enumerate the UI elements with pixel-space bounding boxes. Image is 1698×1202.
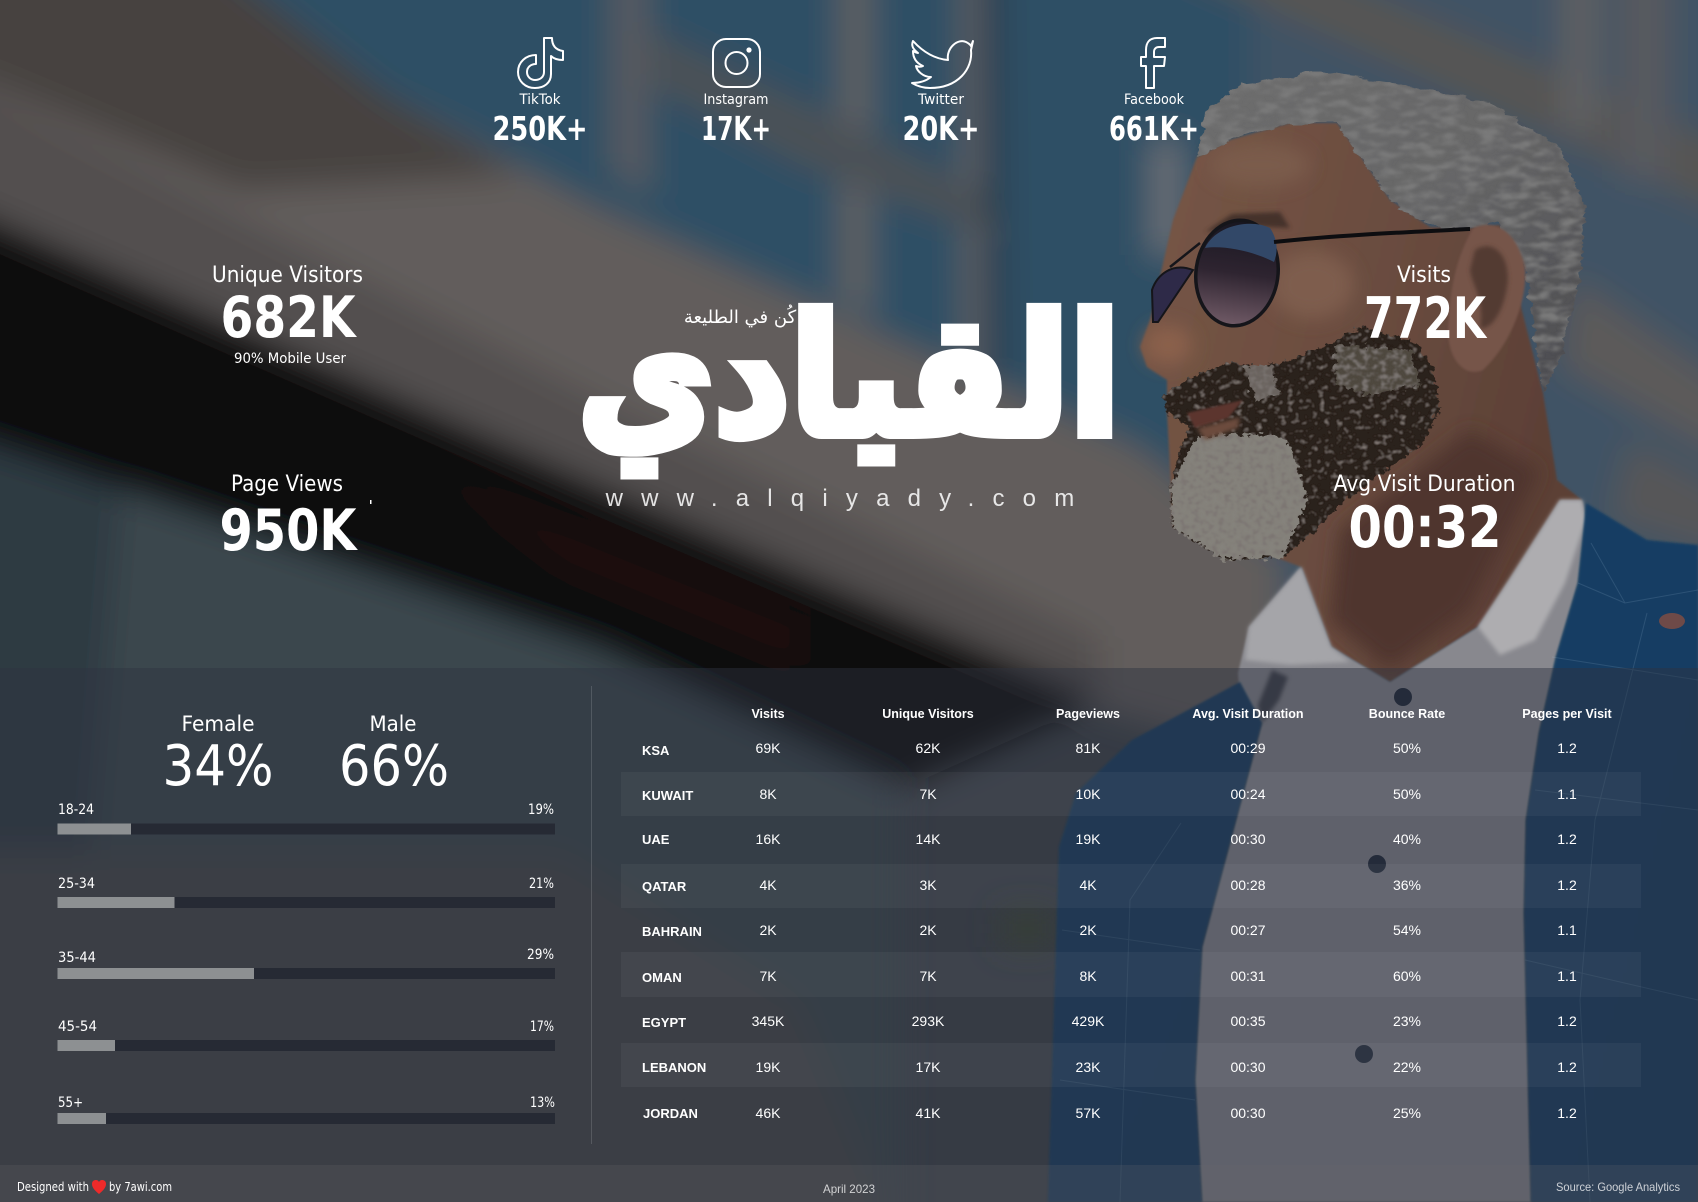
- row Oman: 8K: [1079, 968, 1097, 984]
- row Oman: 60%: [1393, 968, 1421, 984]
- row Egypt: [642, 1013, 1577, 1030]
- logo wordmark: القيادي: [578, 281, 1120, 474]
- row Kuwait: 50%: [1393, 786, 1421, 802]
- icon: Instagram: [713, 39, 760, 87]
- row Lebanon: 1.2: [1557, 1059, 1577, 1075]
- stat: visits: 772K: [1364, 286, 1487, 352]
- TikTok stat: [492, 38, 588, 148]
- age bar 55+: 13%: [530, 1095, 555, 1111]
- age bar 35-44: [58, 947, 555, 979]
- row Oman: 00:31: [1230, 968, 1266, 984]
- age bar 18-24: 19%: [528, 802, 554, 818]
- stat: unique visitors: Unique Visitors: [212, 263, 363, 288]
- row Qatar: 3K: [919, 877, 937, 893]
- row Jordan: 00:30: [1230, 1105, 1266, 1121]
- row Egypt: 1.2: [1557, 1013, 1577, 1029]
- row Qatar: [642, 877, 1577, 894]
- stat: unique visitors: [212, 263, 363, 367]
- collar highlights: [1245, 500, 1586, 723]
- row UAE: 16K: [756, 831, 781, 847]
- row UAE: UAE: [642, 832, 670, 847]
- row Jordan: [643, 1105, 1577, 1121]
- row UAE: 1.2: [1557, 831, 1577, 847]
- footer credit: [17, 1179, 172, 1194]
- Instagram stat: Instagram: [704, 92, 768, 108]
- row Lebanon: 17K: [916, 1059, 941, 1075]
- row Lebanon: 22%: [1393, 1059, 1421, 1075]
- age bar 35-44: 35-44: [58, 950, 96, 966]
- nose and cheek highlights: [1144, 143, 1540, 670]
- TikTok stat: 250K+: [492, 109, 588, 148]
- row Jordan: 57K: [1076, 1105, 1101, 1121]
- row Qatar: QATAR: [642, 879, 687, 894]
- Facebook stat: Facebook: [1124, 92, 1185, 108]
- Instagram stat: [701, 39, 771, 148]
- Facebook stat: [1109, 38, 1199, 148]
- age bar 25-34: 21%: [529, 876, 554, 892]
- row Jordan: 41K: [916, 1105, 941, 1121]
- blazer left panel: [1048, 682, 1262, 1202]
- icon: heart: [92, 1180, 106, 1194]
- age bar 45-54: [58, 1019, 555, 1051]
- row KSA: [642, 740, 1577, 758]
- female share: 34%: [162, 734, 274, 799]
- stat: page views: Page Views: [231, 472, 343, 497]
- row Jordan: 1.2: [1557, 1105, 1577, 1121]
- shirt: [1195, 500, 1586, 1202]
- row Egypt: 23%: [1393, 1013, 1421, 1029]
- age bar 45-54: 45-54: [58, 1019, 97, 1035]
- photo: man in sunglasses and blue blazer: [1048, 72, 1698, 1202]
- row Bahrain: [642, 922, 1577, 939]
- age bar 55+: [58, 1095, 555, 1124]
- stat: unique visitors: 682K: [220, 285, 357, 351]
- panel: gender and age: [58, 712, 555, 1124]
- website: www.alqiyady.com: [605, 485, 1092, 512]
- row Qatar: 4K: [759, 877, 777, 893]
- row Bahrain: 2K: [759, 922, 777, 938]
- age bar 35-44: 29%: [527, 947, 554, 963]
- Twitter stat: Twitter: [917, 92, 964, 108]
- row Egypt: 429K: [1072, 1013, 1105, 1029]
- table header: Avg. Visit Duration: [1192, 707, 1304, 721]
- icon: TikTok: [518, 38, 563, 88]
- lapel pin: [1659, 613, 1685, 629]
- row Egypt: EGYPT: [642, 1015, 686, 1030]
- row KSA: 1.2: [1557, 740, 1577, 756]
- lower panel overlay: [0, 668, 1698, 1202]
- slogan: كُن في الطليعة: [684, 304, 797, 328]
- row UAE: 40%: [1393, 831, 1421, 847]
- row Bahrain: BAHRAIN: [642, 924, 702, 939]
- row UAE: 19K: [1076, 831, 1101, 847]
- footer credit: Designed with: [17, 1179, 89, 1194]
- table header: Visits: [751, 707, 785, 721]
- beard: [1163, 327, 1440, 560]
- shirt buttons: [1355, 688, 1412, 1063]
- row Egypt: 00:35: [1230, 1013, 1266, 1029]
- row KSA: 69K: [756, 740, 781, 756]
- row Jordan: 25%: [1393, 1105, 1421, 1121]
- row Oman: 7K: [919, 968, 937, 984]
- row Lebanon: [642, 1059, 1577, 1075]
- eyebrow: [1205, 212, 1290, 232]
- row Kuwait: 1.1: [1557, 786, 1577, 802]
- logo block: [578, 281, 1120, 512]
- stat: page views: [220, 472, 372, 564]
- row Lebanon: 00:30: [1230, 1059, 1266, 1075]
- icon: Facebook: [1141, 38, 1165, 88]
- row Qatar: 00:28: [1230, 877, 1266, 893]
- age bar 45-54: 17%: [530, 1019, 554, 1035]
- Instagram stat: 17K+: [701, 109, 771, 148]
- row Bahrain: 1.1: [1557, 922, 1577, 938]
- row KSA: KSA: [642, 743, 670, 758]
- row Jordan: 46K: [756, 1105, 781, 1121]
- row Oman: 7K: [759, 968, 777, 984]
- Facebook stat: 661K+: [1109, 109, 1199, 148]
- blazer right panel: [1524, 503, 1698, 1202]
- row Oman: [642, 968, 1577, 985]
- row KSA: 62K: [916, 740, 941, 756]
- blazer check pattern: [1060, 543, 1698, 1202]
- row UAE: [642, 831, 1577, 847]
- social stats row: [492, 38, 1199, 148]
- row UAE: 00:30: [1230, 831, 1266, 847]
- row Egypt: 293K: [912, 1013, 945, 1029]
- footer credit: by 7awi.com: [109, 1179, 172, 1194]
- row KSA: 00:29: [1230, 740, 1266, 756]
- row Bahrain: 2K: [1079, 922, 1097, 938]
- age bar 25-34: 25-34: [58, 876, 95, 892]
- row Bahrain: 00:27: [1230, 922, 1266, 938]
- female share: [162, 712, 274, 799]
- row Bahrain: 2K: [919, 922, 937, 938]
- age bar 55+: 55+: [58, 1095, 83, 1111]
- row Kuwait: KUWAIT: [642, 788, 693, 803]
- footer date: April 2023: [823, 1182, 875, 1196]
- row Kuwait: 10K: [1076, 786, 1101, 802]
- hair: [1197, 72, 1585, 393]
- row KSA: 50%: [1393, 740, 1421, 756]
- table header: [751, 707, 1613, 721]
- row Lebanon: LEBANON: [642, 1060, 706, 1075]
- female share: Female: [182, 712, 254, 736]
- footer band: [0, 1165, 1698, 1202]
- row Kuwait: 00:24: [1230, 786, 1266, 802]
- table header: Unique Visitors: [882, 707, 974, 721]
- male share: 66%: [339, 734, 449, 799]
- sunglasses: [1152, 215, 1470, 331]
- age bar 18-24: [58, 802, 555, 834]
- TikTok stat: TikTok: [519, 92, 561, 108]
- Twitter stat: [902, 41, 980, 148]
- gray chin beard: [1170, 433, 1307, 560]
- row UAE: 14K: [916, 831, 941, 847]
- row Lebanon: 23K: [1076, 1059, 1101, 1075]
- age bar 18-24: 18-24: [58, 802, 94, 818]
- stat: unique visitors: 90% Mobile User: [234, 351, 346, 367]
- face and neck skin: [1140, 123, 1582, 682]
- row Qatar: 4K: [1079, 877, 1097, 893]
- table header: Pageviews: [1056, 707, 1120, 721]
- stat: visits: [1364, 263, 1487, 352]
- stat: page views: 950K: [220, 498, 358, 564]
- Twitter stat: 20K+: [902, 109, 980, 148]
- male share: [339, 712, 449, 799]
- row Oman: OMAN: [642, 970, 682, 985]
- row Jordan: JORDAN: [643, 1106, 698, 1121]
- panel: country table: [621, 707, 1641, 1121]
- footer source: Source: Google Analytics: [1556, 1180, 1680, 1194]
- table header: Bounce Rate: [1369, 707, 1445, 721]
- row Kuwait: [642, 786, 1577, 803]
- row Lebanon: 19K: [756, 1059, 781, 1075]
- row KSA: 81K: [1076, 740, 1101, 756]
- table header: Pages per Visit: [1522, 707, 1613, 721]
- row Egypt: 345K: [752, 1013, 785, 1029]
- age bar 25-34: [58, 876, 555, 908]
- row Bahrain: 54%: [1393, 922, 1421, 938]
- lips: [1187, 400, 1243, 428]
- stat: visits: Visits: [1397, 263, 1451, 288]
- row Oman: 1.1: [1557, 968, 1577, 984]
- row Qatar: 1.2: [1557, 877, 1577, 893]
- stat: average visit duration: 00:32: [1348, 495, 1502, 561]
- row Qatar: 36%: [1393, 877, 1421, 893]
- ear: [1448, 225, 1525, 372]
- icon: Twitter: [912, 41, 973, 88]
- row Kuwait: 8K: [759, 786, 777, 802]
- male share: Male: [370, 712, 416, 736]
- stat: average visit duration: Avg.Visit Duration: [1334, 472, 1516, 497]
- stat: average visit duration: [1334, 472, 1516, 561]
- row Kuwait: 7K: [919, 786, 937, 802]
